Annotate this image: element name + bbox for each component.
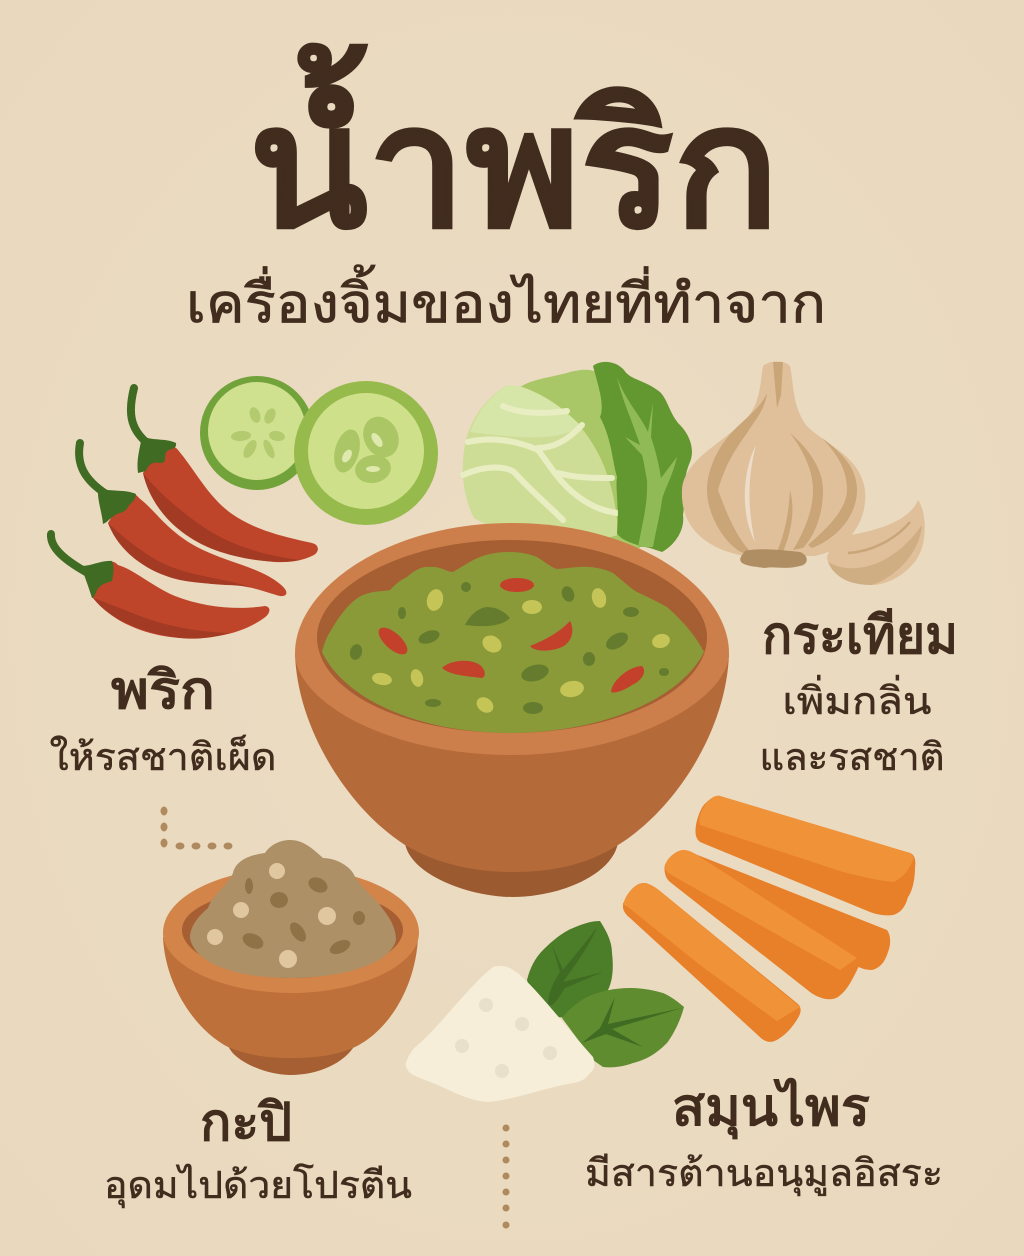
- dotted connector: bottom: [502, 1124, 510, 1228]
- icon: main bowl with chili paste: [295, 523, 729, 897]
- icon: basil leaves: [527, 921, 684, 1067]
- dotted connector: left: [160, 806, 232, 850]
- title: น้ำพริก: [249, 43, 779, 263]
- label: herbs: สมุนไพร: [672, 1077, 870, 1140]
- label: shrimp paste: [104, 1094, 412, 1208]
- label: garlic: [760, 607, 958, 779]
- label: herbs: [585, 1077, 943, 1196]
- subtitle: เครื่องจิ้มของไทยที่ทำจาก: [186, 265, 826, 334]
- label: shrimp paste: อุดมไปด้วยโปรตีน: [104, 1163, 412, 1208]
- label: garlic: และรสชาติ: [760, 737, 944, 779]
- icon: cucumber slices: [200, 376, 438, 525]
- label: garlic: เพิ่มกลิ่น: [782, 675, 932, 723]
- icon: chili peppers: [51, 388, 318, 639]
- icon: carrot sticks: [623, 796, 915, 1042]
- icon: small bowl of shrimp paste: [163, 840, 419, 1075]
- icon: lettuce leaf: [593, 362, 692, 552]
- label: garlic: กระเทียม: [762, 607, 958, 665]
- label: herbs: มีสารต้านอนุมูลอิสระ: [585, 1153, 943, 1196]
- icon: garlic clove: [827, 500, 925, 585]
- icon: white powder pile: [406, 966, 594, 1102]
- label: chili: [50, 662, 276, 779]
- label: chili: พริก: [111, 662, 215, 720]
- label: chili: ให้รสชาติเผ็ด: [50, 734, 276, 779]
- icon: cabbage: [463, 370, 640, 548]
- icon: garlic bulb: [682, 362, 865, 568]
- label: shrimp paste: กะปิ: [200, 1094, 292, 1152]
